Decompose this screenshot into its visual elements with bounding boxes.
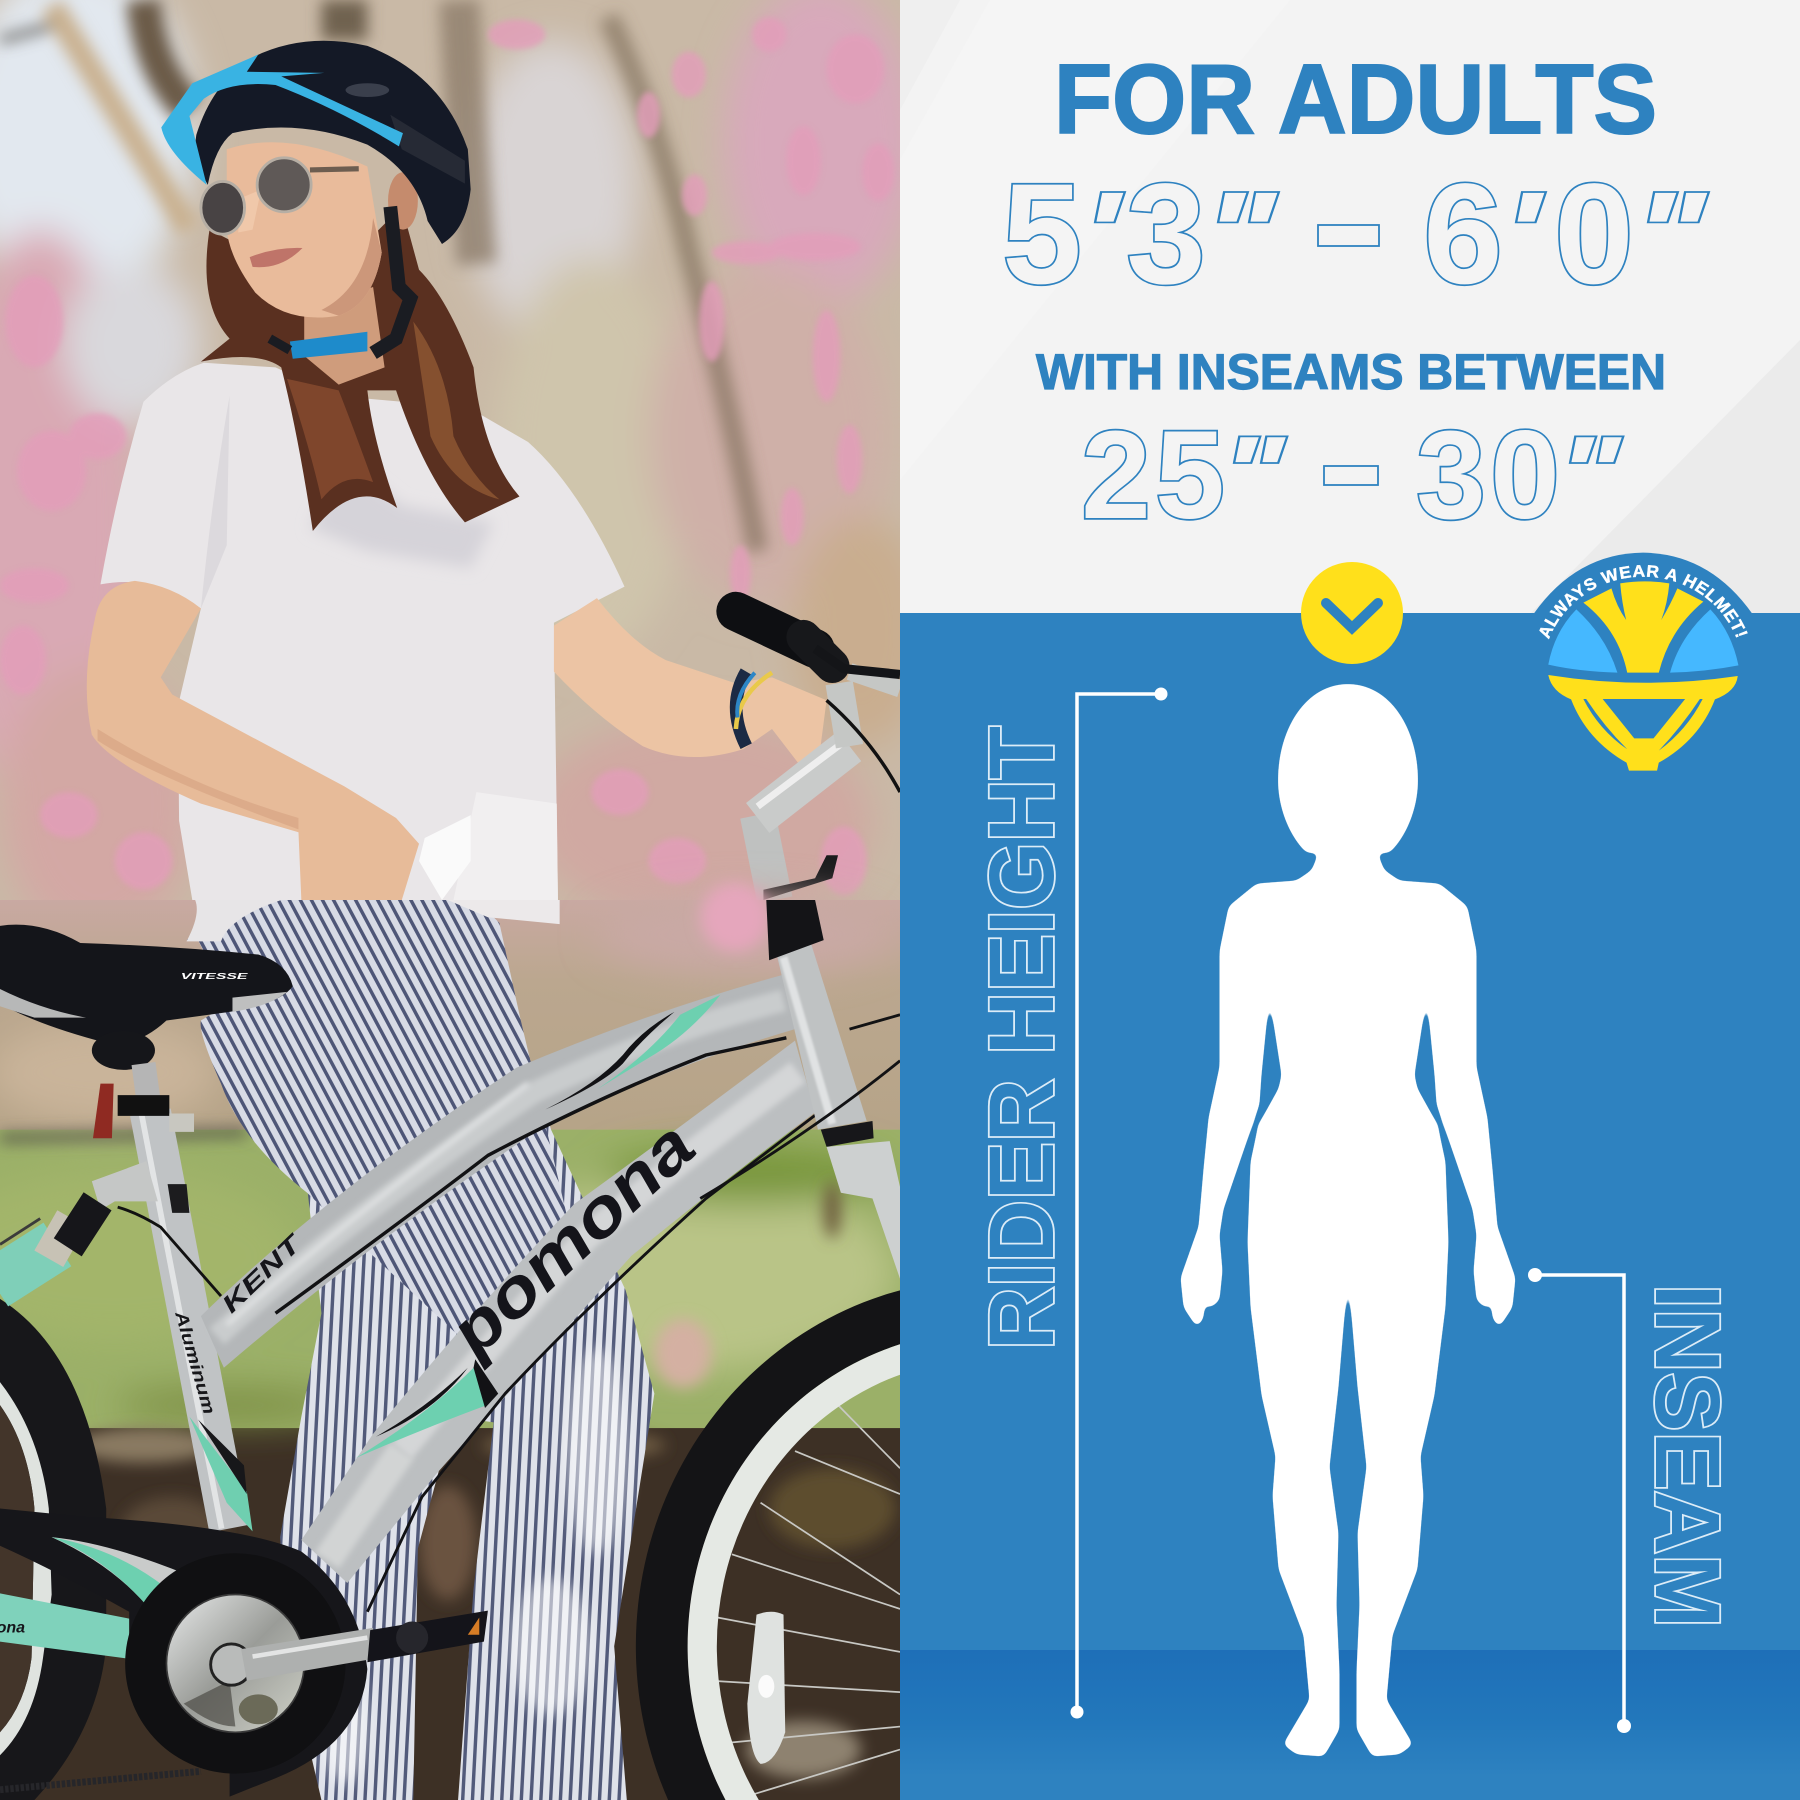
inseam range: 2 bbox=[1081, 406, 1151, 545]
inseam bracket line bbox=[1528, 1268, 1631, 1733]
rider height range bbox=[1002, 155, 1708, 314]
brand logo: pomona bbox=[434, 1108, 709, 1372]
top tube bbox=[201, 975, 795, 1368]
hair bbox=[201, 207, 519, 531]
face and neck bbox=[227, 142, 418, 385]
photo lower half: bicycle frame bbox=[0, 883, 900, 1800]
tube graphics bbox=[189, 1417, 253, 1531]
handlebar and stem bbox=[736, 611, 900, 900]
label: inseam: INSEAM bbox=[1636, 1284, 1738, 1628]
white t-shirt bbox=[100, 363, 625, 900]
striped trousers bbox=[187, 900, 654, 1800]
head tube, fork and cables bbox=[276, 900, 900, 1313]
inseam range: ' bbox=[1249, 416, 1286, 528]
seat post and seat tube bbox=[92, 1064, 253, 1531]
rider height range: ' bbox=[1665, 169, 1708, 297]
saddle brand: VITESSE bbox=[181, 972, 249, 981]
panel: blue measurement background bbox=[900, 613, 1800, 1800]
badge: always wear a helmet bbox=[1534, 552, 1752, 771]
rider height range: ' bbox=[1634, 169, 1677, 297]
photo upper half: woman in park bbox=[0, 0, 930, 941]
panel: light header background bbox=[900, 0, 1800, 614]
rider height range: 5 bbox=[1002, 155, 1082, 314]
badge curved text: ALWAYS WEAR A HELMET! bbox=[1539, 565, 1748, 640]
inseam range: 3 bbox=[1416, 406, 1486, 545]
rider height range: ' bbox=[1081, 169, 1124, 297]
inseam range: ' bbox=[1585, 416, 1622, 528]
front wheel with reflector bbox=[636, 1290, 900, 1800]
mint chain stay with label bbox=[0, 1593, 129, 1659]
chainring cover and crank bbox=[125, 1553, 373, 1774]
rider height range: ' bbox=[1235, 169, 1278, 297]
sunglasses bbox=[201, 158, 359, 234]
left arm and hand bbox=[87, 581, 419, 900]
inseam range bbox=[1081, 406, 1622, 545]
inseam range: ' bbox=[1558, 416, 1595, 528]
subheading: with inseams between: WITH INSEAMS BETWEEN bbox=[1036, 344, 1666, 400]
rider height range: ' bbox=[1204, 169, 1247, 297]
rider height range: 6 bbox=[1423, 155, 1503, 314]
rear suspension and mint frame bbox=[0, 1201, 221, 1296]
tube lettering: Aluminum bbox=[171, 1308, 220, 1416]
rider height range: 0 bbox=[1554, 155, 1634, 314]
helmet bbox=[161, 41, 471, 244]
panel: photo of rider with bicycle bbox=[0, 0, 930, 1800]
blurred blossom background bbox=[0, 0, 930, 941]
icon: yellow chevron circle bbox=[1301, 562, 1403, 664]
chin strap bbox=[270, 207, 410, 359]
right arm and hand bbox=[554, 598, 827, 766]
pedal bbox=[367, 1611, 488, 1662]
down tube bbox=[301, 1041, 815, 1612]
blurred park background bbox=[0, 883, 900, 1800]
saddle bbox=[0, 925, 293, 1070]
body silhouette bbox=[1182, 684, 1514, 1755]
inseam range: ' bbox=[1222, 416, 1259, 528]
inseam range: 0 bbox=[1490, 406, 1560, 545]
rider height bracket line bbox=[1070, 688, 1168, 1718]
rider height range: 3 bbox=[1126, 155, 1206, 314]
rear wheel bbox=[0, 1299, 106, 1800]
model name: KENT bbox=[217, 1228, 309, 1319]
chain guard bbox=[0, 1508, 367, 1797]
rider height range: ' bbox=[1502, 169, 1545, 297]
label: rider height: RIDER HEIGHT bbox=[971, 726, 1073, 1350]
chain bbox=[0, 1771, 201, 1790]
inseam range: 5 bbox=[1155, 406, 1225, 545]
heading: for adults: FOR ADULTS bbox=[1054, 44, 1657, 154]
